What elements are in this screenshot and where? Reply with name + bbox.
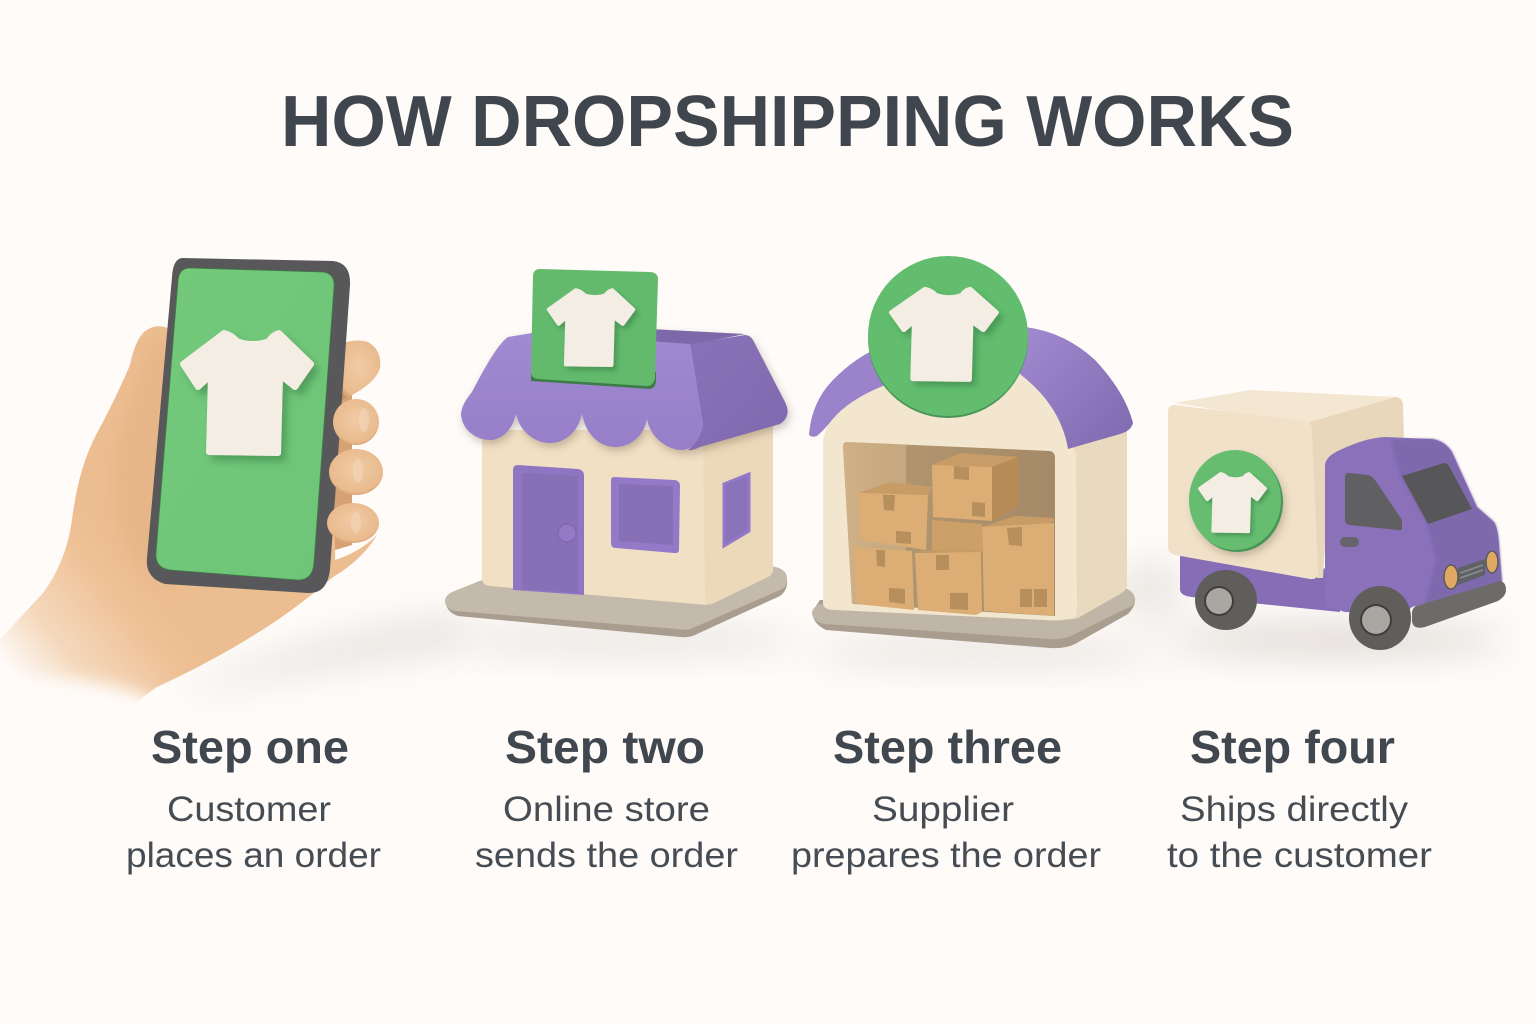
step two text [475,721,738,875]
bumper [1412,581,1506,628]
step four text: Ships directly [1180,790,1409,829]
cab side window [1345,473,1402,530]
box: big right [982,516,1054,616]
store walls [482,420,773,605]
truck grille [1458,559,1485,585]
step one text: Customer [167,790,331,829]
store side window [724,474,749,546]
step one text [126,721,381,875]
step three text: Step three [833,721,1062,773]
warehouse walls [823,350,1127,620]
store base [445,566,787,637]
step two text: sends the order [475,836,738,875]
phone screen [156,268,334,580]
step two text: Online store [503,790,710,829]
title: HOW DROPSHIPPING WORKS [281,82,1294,162]
t-shirt icon [183,333,311,453]
box: back middle [932,520,982,552]
hand [0,326,380,716]
purple arched roof [809,327,1133,449]
step four text: to the customer [1167,836,1432,875]
step two illustration: online store [445,269,788,637]
box: bottom middle [915,548,982,615]
cab windshield [1402,463,1472,524]
store door [513,465,584,595]
warehouse interior [843,442,1055,616]
green badge with t-shirt [1189,450,1283,552]
headlights [1444,551,1498,589]
step three text: Supplier [872,790,1014,829]
truck cab [1325,437,1502,614]
step three text [791,721,1101,875]
step four illustration: delivery truck [1168,390,1506,650]
door handle [1340,537,1359,547]
box: top middle [932,453,1018,521]
box: bottom left [854,547,914,610]
fingers [327,399,383,543]
step one text: places an order [126,836,381,875]
step one illustration: hand holding phone [0,258,383,746]
step four text [1167,721,1432,875]
green badge with t-shirt [868,256,1028,418]
front wheel [1349,586,1411,650]
truck chassis [1180,555,1340,612]
store window [611,477,680,553]
cardboard boxes [854,453,1054,616]
step one text: Step one [151,721,349,773]
step two text: Step two [505,721,705,773]
step three illustration: supplier warehouse [809,256,1135,648]
hand fade [0,678,160,746]
phone body [147,258,350,593]
store sign with t-shirt [531,269,658,389]
floor shadows [170,562,1505,695]
step three text: prepares the order [791,836,1101,875]
store roof [461,329,788,450]
warehouse base [812,586,1135,648]
box: upper left [859,482,932,550]
rear wheel [1195,570,1257,630]
step four text: Step four [1190,721,1395,773]
cargo box [1168,390,1404,579]
